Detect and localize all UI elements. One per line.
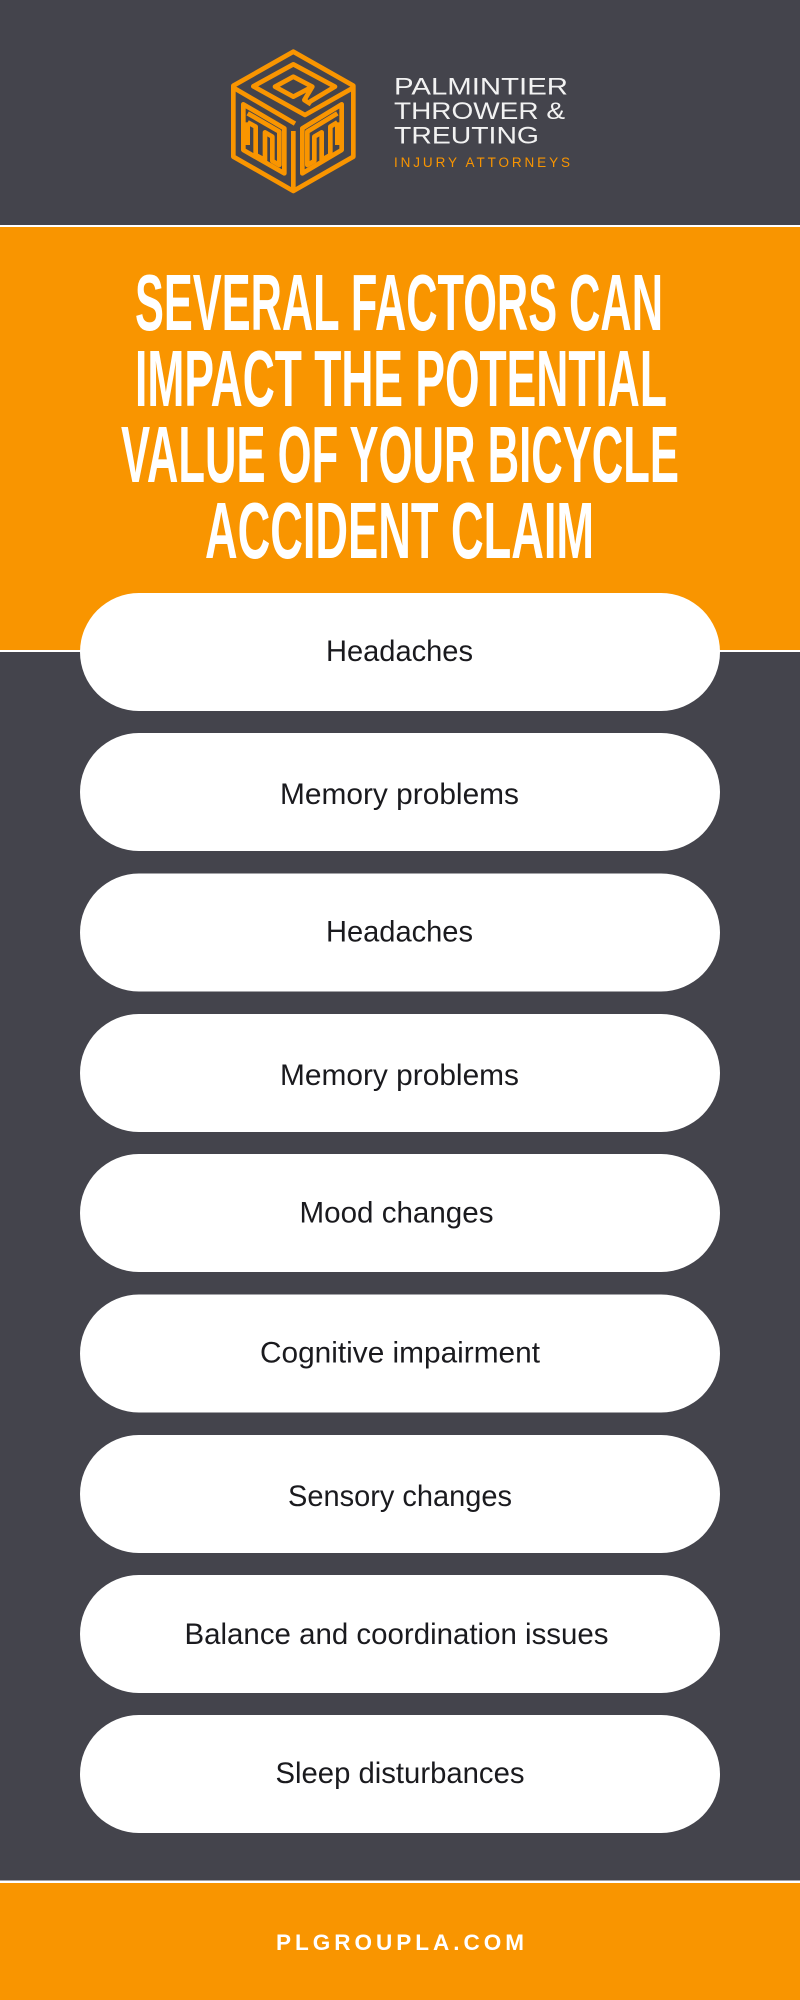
- pill: balance and coordination issues: [80, 1575, 720, 1693]
- pill: memory problems: Memory problems: [280, 1059, 519, 1092]
- logo wordmark: TREUTING: [394, 122, 539, 150]
- list of pills: [80, 593, 720, 1833]
- footer url: PLGROUPLA.COM: [276, 1930, 524, 1955]
- icon: cube logo: [233, 52, 353, 191]
- logo wordmark: INJURY ATTORNEYS: [394, 155, 570, 170]
- pill: memory problems: [80, 1014, 720, 1132]
- pill: sleep disturbances: [80, 1715, 720, 1833]
- header band with logo: [233, 52, 570, 191]
- footer band: [0, 1880, 800, 2000]
- pill: memory problems: [80, 733, 720, 851]
- title: [121, 258, 679, 575]
- pill: headaches: Headaches: [326, 635, 473, 668]
- pill: headaches: Headaches: [326, 916, 473, 948]
- title panel: [0, 225, 800, 652]
- pill: cognitive impairment: [80, 1294, 720, 1412]
- pill: sensory changes: [80, 1435, 720, 1553]
- logo wordmark: THROWER &: [394, 98, 565, 125]
- pill: mood changes: [80, 1154, 720, 1272]
- pill: balance and coordination issues: Balance and coordination issues: [184, 1618, 608, 1651]
- pill: headaches: [80, 874, 720, 992]
- pill: cognitive impairment: Cognitive impairment: [260, 1336, 540, 1370]
- pill: mood changes: Mood changes: [300, 1196, 494, 1230]
- logo wordmark: [394, 74, 570, 170]
- pill: headaches: [80, 593, 720, 711]
- pill: sensory changes: Sensory changes: [288, 1480, 512, 1513]
- pill: memory problems: Memory problems: [280, 778, 519, 811]
- logo wordmark: PALMINTIER: [394, 74, 568, 100]
- pill: sleep disturbances: Sleep disturbances: [276, 1757, 524, 1790]
